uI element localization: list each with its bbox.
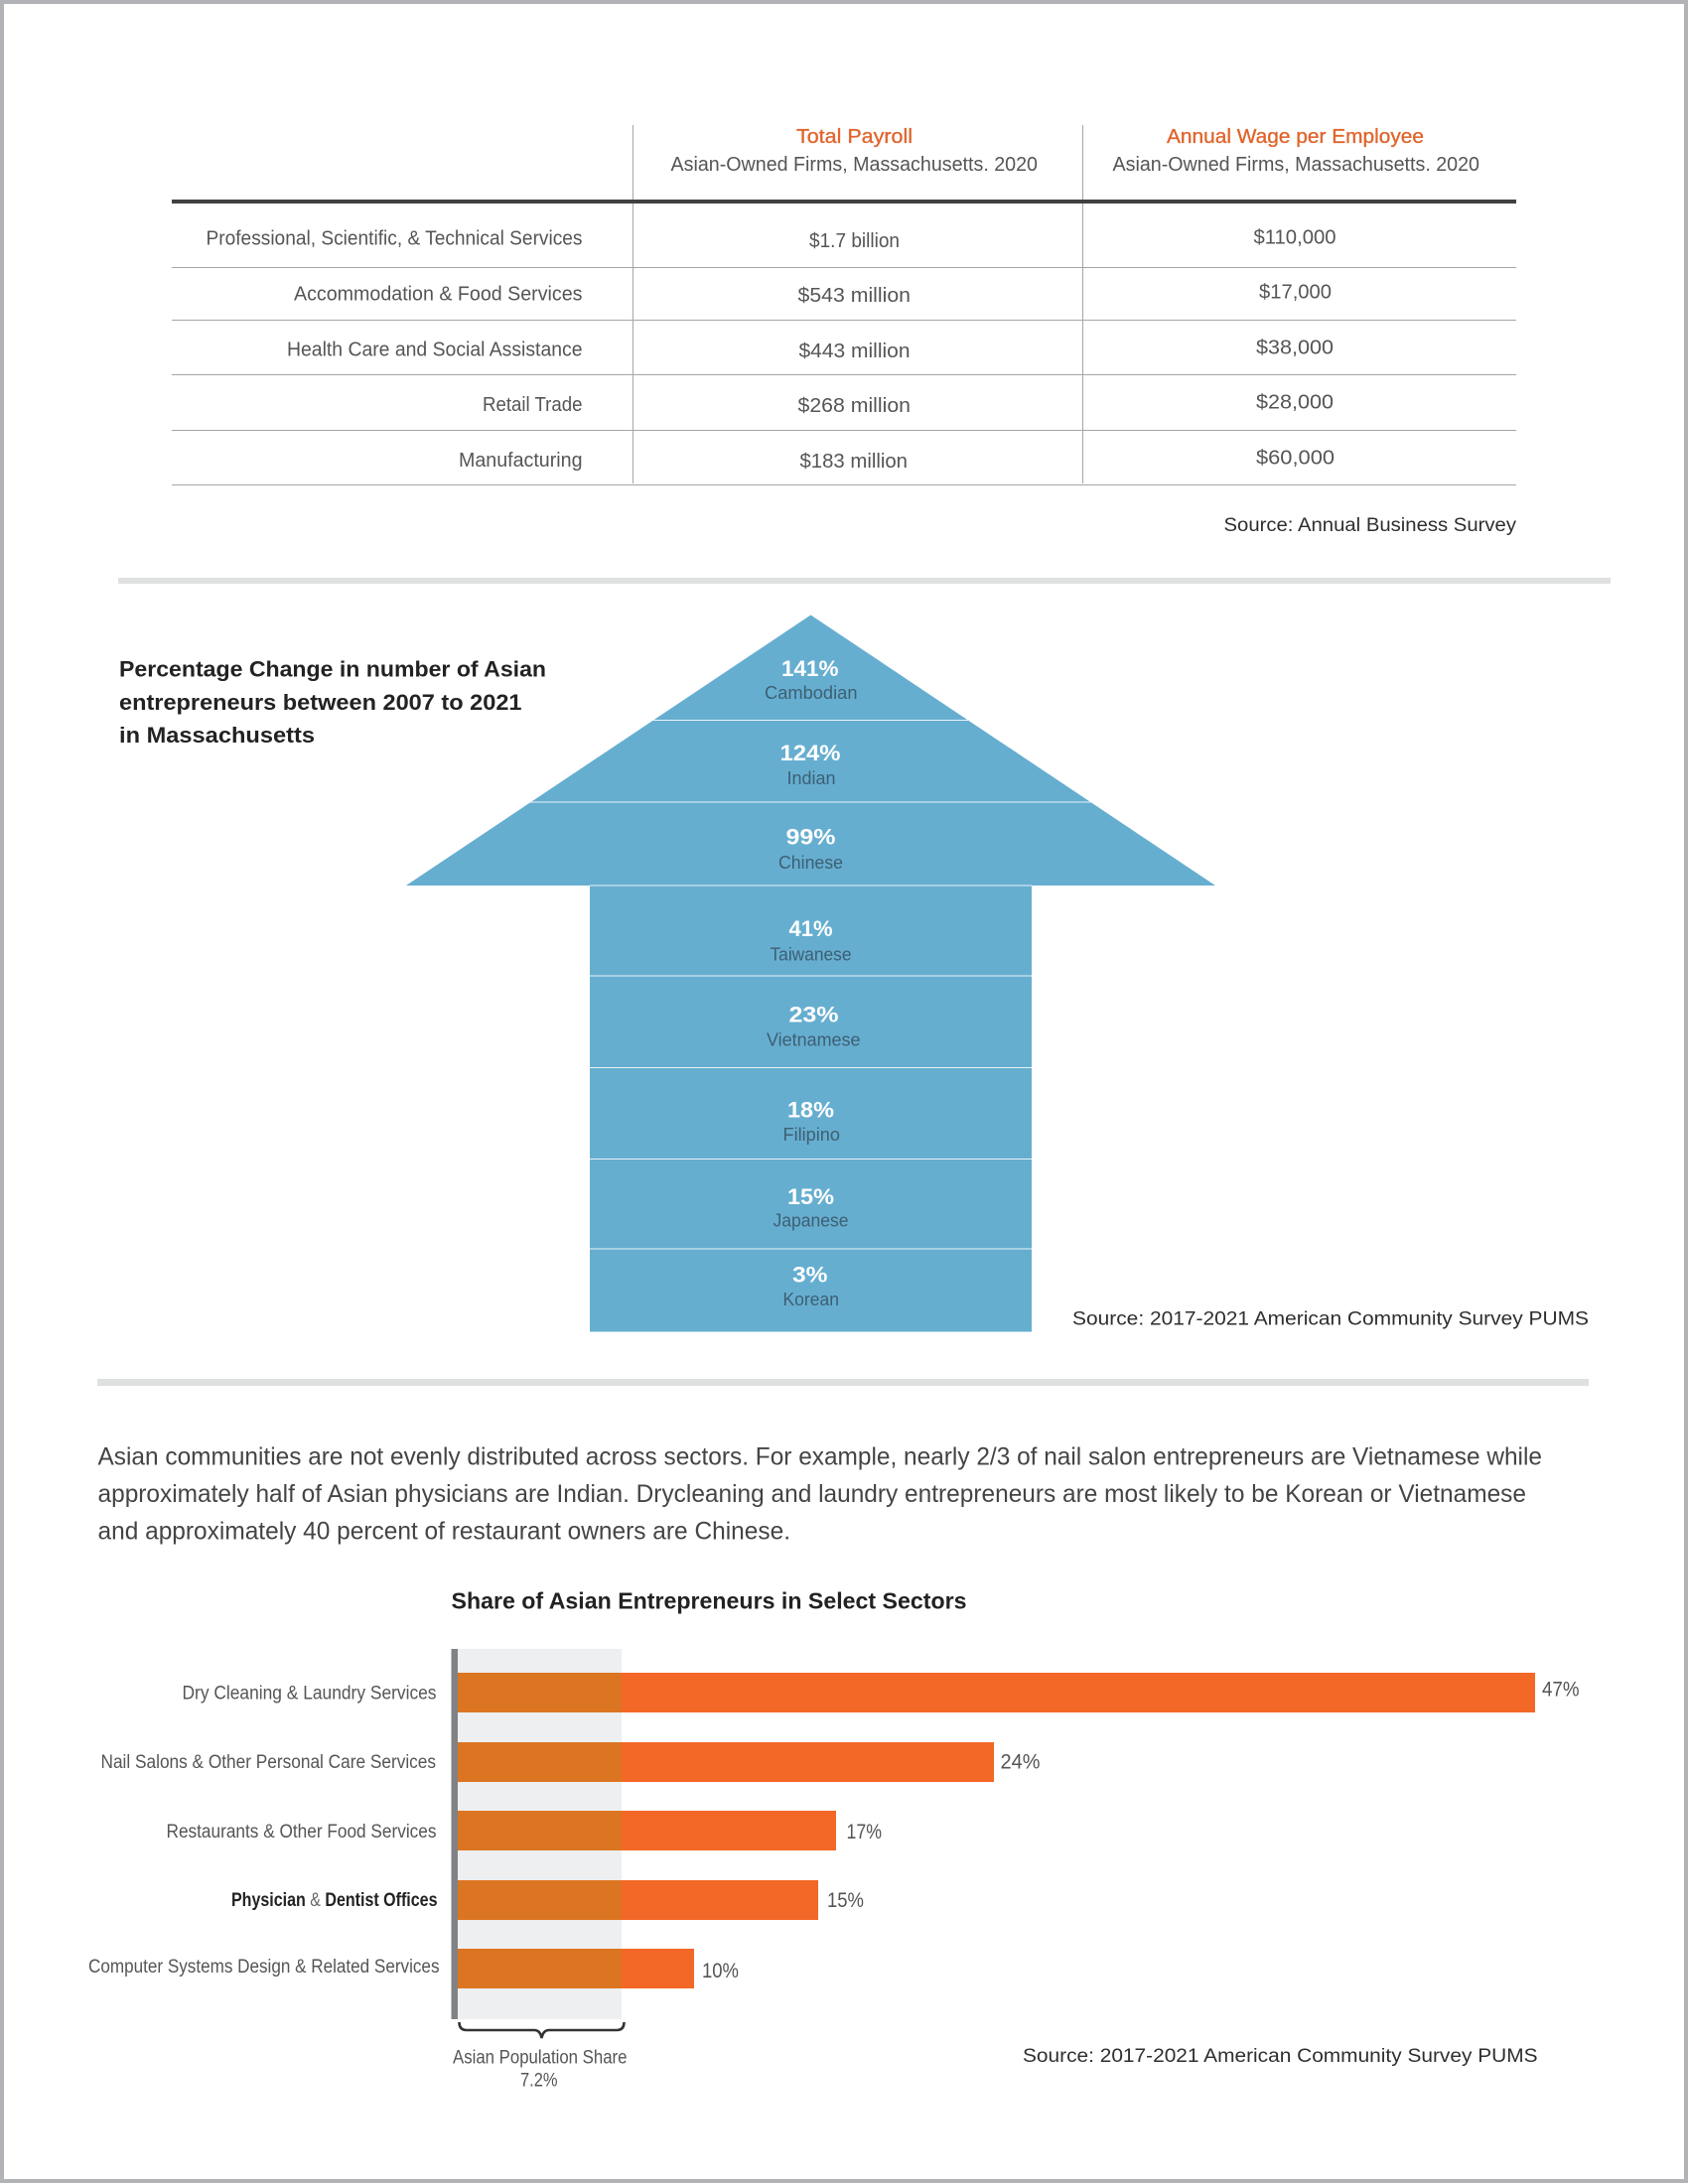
paragraph: distribution across sectors: approximately half of Asian physicians are Indian. Drycleaning and laundry entrepreneurs are most likely to be Korean or Vietnamese xyxy=(97,1480,1526,1508)
bar: nail salons 24%: 24% xyxy=(1001,1751,1041,1773)
table header: total payroll: Total Payroll xyxy=(796,126,913,148)
segment: Vietnamese 23%: 23% xyxy=(788,1003,838,1026)
source: american community survey (arrow): Source: 2017-2021 American Community Survey PUMS xyxy=(1072,1308,1589,1330)
bar: computer systems design 10% xyxy=(88,1949,739,1988)
segment: Chinese 99%: Chinese xyxy=(778,853,843,873)
heading: percentage change in Asian entrepreneurs: entrepreneurs between 2007 to 2021 xyxy=(119,690,522,715)
segment: Vietnamese 23%: Vietnamese xyxy=(767,1030,860,1050)
table row: health care: Health Care and Social Assistance xyxy=(287,340,582,361)
segment: Indian 124%: Indian xyxy=(786,768,836,788)
segment: Cambodian 141%: Cambodian xyxy=(765,683,858,703)
segment: Chinese 99% xyxy=(778,824,843,873)
table header: total payroll: Asian-Owned Firms, Massachusetts. 2020 xyxy=(671,154,1038,176)
bar: dry cleaning 47%: 47% xyxy=(1542,1678,1579,1702)
table header: annual wage per employee xyxy=(1112,126,1479,176)
table row: retail trade: Retail Trade xyxy=(483,394,582,416)
bar: physician and dentist offices 15% xyxy=(231,1880,864,1920)
segment: Cambodian 141% xyxy=(765,656,858,703)
annotation: Asian population share 7.2%: 7.2% xyxy=(520,2071,558,2091)
segment: Cambodian 141%: 141% xyxy=(781,656,838,681)
table row: health care: $38,000 xyxy=(1256,338,1334,359)
panel: payroll and wage table xyxy=(172,125,1516,485)
table header: annual wage per employee: Asian-Owned Firms, Massachusetts. 2020 xyxy=(1112,154,1479,176)
segment: Chinese 99%: 99% xyxy=(786,824,836,850)
table row: retail trade xyxy=(483,391,1334,417)
table row: manufacturing: $60,000 xyxy=(1256,447,1335,469)
table row: retail trade: $268 million xyxy=(798,395,911,417)
brace: Asian population share xyxy=(459,2022,624,2038)
segment: Korean 3%: Korean xyxy=(782,1290,839,1309)
chart title: Share of Asian Entrepreneurs in Select Sectors xyxy=(451,1588,967,1614)
table row: accommodation and food: $17,000 xyxy=(1259,282,1332,304)
table row: professional services: $110,000 xyxy=(1253,226,1336,248)
heading: percentage change in Asian entrepreneurs: in Massachusetts xyxy=(119,723,315,748)
segment: Taiwanese 41%: 41% xyxy=(788,916,832,941)
annotation: Asian population share 7.2%: Asian Population Share xyxy=(453,2047,628,2069)
heading: percentage change in Asian entrepreneurs xyxy=(119,657,546,748)
population share band xyxy=(458,1649,622,2019)
table row: accommodation and food: Accommodation & Food Services xyxy=(294,284,582,306)
segment: Filipino 18%: Filipino xyxy=(782,1125,840,1145)
table header: annual wage per employee: Annual Wage per Employee xyxy=(1167,126,1424,148)
table row: health care: $443 million xyxy=(798,341,910,362)
segment: Korean 3%: 3% xyxy=(792,1263,828,1287)
segment: Indian 124%: 124% xyxy=(780,741,840,765)
segment: Filipino 18% xyxy=(782,1098,840,1145)
source: annual business survey: Source: Annual Business Survey xyxy=(1223,515,1517,536)
table row: accommodation and food: $543 million xyxy=(798,285,911,307)
segment: Japanese 15% xyxy=(773,1184,848,1231)
arrow chart xyxy=(406,615,1215,1332)
table row: retail trade: $28,000 xyxy=(1256,391,1334,413)
annotation: Asian population share 7.2% xyxy=(453,2047,628,2091)
table row: professional services: $1.7 billion xyxy=(809,230,900,252)
table row: manufacturing xyxy=(459,447,1335,473)
axis xyxy=(451,1649,458,2019)
bar: dry cleaning 47%: Dry Cleaning & Laundry Services xyxy=(183,1684,437,1704)
paragraph: distribution across sectors: Asian communities are not evenly distributed across sectors. For example, nearly 2/3 of nail salon entrepreneurs are Vietnamese while xyxy=(97,1443,1542,1471)
paragraph: distribution across sectors xyxy=(97,1443,1542,1545)
bar: physician and dentist offices 15%: 15% xyxy=(827,1889,864,1912)
bar: physician and dentist offices 15%: Physician & Dentist Offices xyxy=(231,1890,437,1911)
table row: professional services xyxy=(207,226,1336,252)
bar: computer systems design 10%: Computer Systems Design & Related Services xyxy=(88,1957,439,1978)
bar: dry cleaning 47% xyxy=(183,1673,1579,1712)
segment: Japanese 15%: 15% xyxy=(787,1184,834,1209)
heading: percentage change in Asian entrepreneurs: Percentage Change in number of Asian xyxy=(119,657,546,681)
table row: manufacturing: Manufacturing xyxy=(459,450,582,472)
table row: accommodation and food xyxy=(294,282,1332,307)
paragraph: distribution across sectors: and approximately 40 percent of restaurant owners are Chinese. xyxy=(97,1517,790,1545)
segment: Vietnamese 23% xyxy=(767,1003,860,1050)
arrow shape xyxy=(406,615,1215,1332)
table row: health care xyxy=(287,338,1334,362)
segment: Indian 124% xyxy=(780,741,840,788)
bar chart: share of Asian entrepreneurs xyxy=(88,1649,1579,2091)
bar: nail salons 24% xyxy=(101,1742,1041,1782)
bar: nail salons 24%: Nail Salons & Other Personal Care Services xyxy=(101,1752,436,1773)
table row: manufacturing: $183 million xyxy=(800,451,908,473)
bar: computer systems design 10%: 10% xyxy=(702,1960,739,1982)
bar: restaurants 17%: 17% xyxy=(846,1821,882,1843)
table row: professional services: Professional, Scientific, & Technical Services xyxy=(207,228,582,250)
segment: Taiwanese 41% xyxy=(771,916,852,965)
bar: restaurants 17% xyxy=(167,1811,882,1850)
segment: Japanese 15%: Japanese xyxy=(773,1211,848,1231)
bar: restaurants 17%: Restaurants & Other Food Services xyxy=(167,1822,437,1843)
segment: Korean 3% xyxy=(782,1263,839,1309)
table header: total payroll xyxy=(671,126,1038,176)
segment: Filipino 18%: 18% xyxy=(787,1098,834,1122)
segment: Taiwanese 41%: Taiwanese xyxy=(771,945,852,965)
source: american community survey (bars): Source: 2017-2021 American Community Survey PUMS xyxy=(1023,2046,1537,2067)
